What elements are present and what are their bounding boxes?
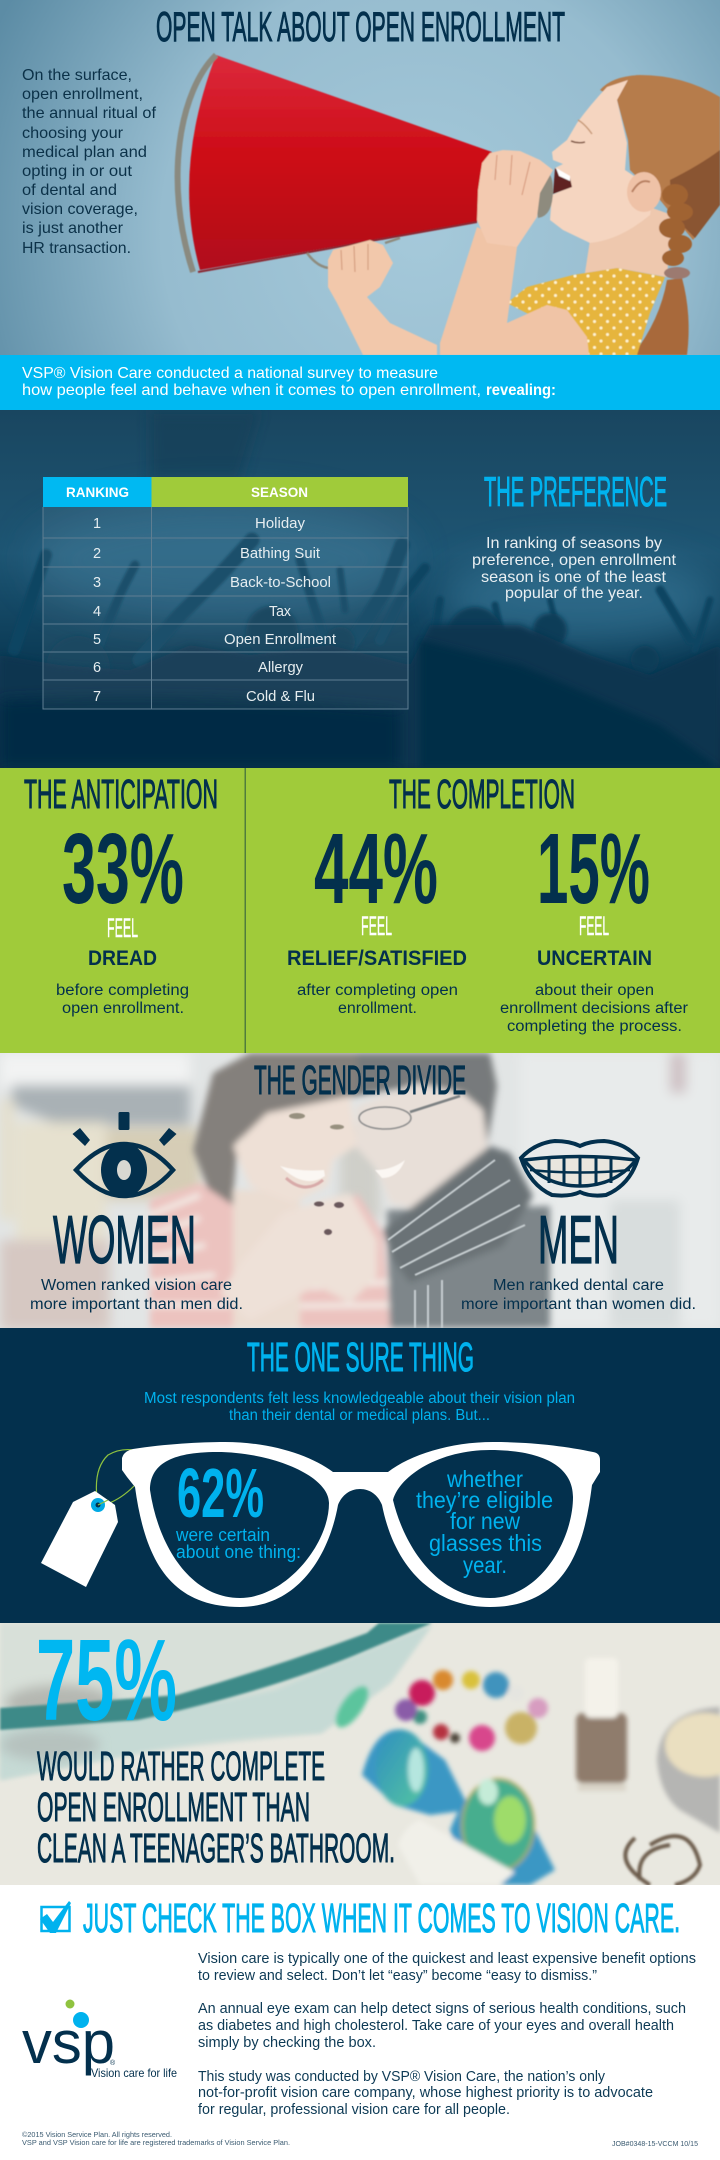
panel: check the box	[0, 1885, 720, 2160]
text block: preference description: preference, open enrollment	[472, 552, 677, 569]
table: season rankings: SEASON	[251, 484, 308, 500]
right lens text: they’re eligible	[416, 1487, 553, 1513]
stat: 44% relief: FEEL	[361, 911, 392, 941]
panel: hero	[0, 0, 720, 355]
text block: preference description	[472, 535, 677, 602]
text block: intro: vision coverage,	[22, 201, 138, 218]
icon: white glasses	[122, 1442, 600, 1607]
table: season rankings	[43, 477, 408, 709]
stat: 44% relief: RELIEF/SATISFIED	[287, 947, 467, 970]
stat: 44% relief: after completing open	[297, 982, 458, 999]
text block: vision care: to review and select. Don’t let “easy” become “easy to dismiss.”	[198, 1967, 597, 1984]
stat: 33% dread: 33%	[62, 813, 184, 925]
heading: the gender divide: THE GENDER DIVIDE	[254, 1057, 466, 1103]
table: season rankings: Back-to-School	[230, 575, 331, 591]
stat: 33% dread: before completing	[56, 982, 189, 999]
left lens text: were certain	[175, 1525, 270, 1545]
panel: the one sure thing	[0, 1328, 720, 1623]
text block: vision care	[198, 1950, 696, 2118]
panel: survey banner: revealing:	[486, 382, 556, 399]
panel: survey banner: VSP® Vision Care conducted a national survey to measure	[22, 365, 438, 382]
stat: 33% dread: FEEL	[107, 913, 138, 943]
panel: survey banner	[0, 355, 720, 410]
table: season rankings: 7	[93, 689, 101, 705]
text block: vision care: simply by checking the box.	[198, 2034, 376, 2051]
stat: 33% dread	[56, 813, 189, 1017]
text block: respondents	[144, 1390, 575, 1424]
text block: preference description: popular of the year.	[505, 585, 643, 602]
label: men: more important than women did.	[461, 1296, 696, 1313]
logo: VSP: ®	[110, 2059, 116, 2067]
text block: vision care: not-for-profit vision care company, whose highest priority is to advocate	[198, 2084, 653, 2101]
left lens text	[175, 1454, 301, 1562]
text block: vision care: Vision care is typically one of the quickest and least expensive benefit options	[198, 1950, 696, 1967]
text block: intro: opting in or out	[22, 163, 133, 180]
text block: vision care: as diabetes and high cholesterol. Take care of your eyes and overall health	[198, 2017, 674, 2034]
stat: 15% uncertain: enrollment decisions after	[500, 1000, 688, 1017]
right lens text	[416, 1466, 553, 1578]
table: season rankings: Cold & Flu	[246, 689, 315, 705]
stat: 44% relief: enrollment.	[338, 1000, 417, 1017]
text block: intro: is just another	[22, 220, 124, 237]
right lens text: glasses this	[429, 1530, 542, 1556]
left lens text: 62%	[177, 1454, 264, 1532]
left lens text: about one thing:	[176, 1542, 301, 1562]
logo: VSP: Vision care for life	[91, 2066, 177, 2080]
text block: intro: HR transaction.	[22, 240, 131, 257]
text block: respondents: Most respondents felt less knowledgeable about their vision plan	[144, 1390, 575, 1407]
stat: 33% dread: DREAD	[88, 947, 157, 970]
icon: checkbox	[40, 1901, 71, 1933]
photo: girl with red megaphone	[178, 55, 720, 355]
panel: the gender divide	[0, 1053, 720, 1330]
table: season rankings: 5	[93, 632, 101, 648]
table: season rankings: 6	[93, 660, 101, 676]
text block: intro: On the surface,	[22, 67, 132, 84]
table: season rankings: Tax	[269, 604, 292, 620]
panel: anticipation and completion	[0, 768, 720, 1053]
label: men	[461, 1202, 696, 1313]
panel: 75 percent bathroom	[0, 1615, 720, 1885]
text block: rather complete	[37, 1743, 395, 1871]
icon: smiling mouth	[521, 1141, 638, 1196]
stat: 15% uncertain: completing the process.	[507, 1018, 682, 1035]
table: season rankings: Bathing Suit	[240, 546, 320, 562]
text block: intro: of dental and	[22, 182, 117, 199]
text block: preference description: season is one of the least	[481, 569, 667, 586]
text block: vision care: for regular, professional vision care for all people.	[198, 2101, 510, 2118]
stat: 15% uncertain: UNCERTAIN	[537, 947, 652, 970]
footer: legal: JOB#0348-15-VCCM 10/15	[612, 2139, 698, 2148]
table: season rankings: Holiday	[255, 516, 306, 532]
table: season rankings: 4	[93, 604, 101, 620]
stat: 33% dread: open enrollment.	[62, 1000, 184, 1017]
logo: VSP: vsp	[22, 2009, 115, 2076]
icon: eye	[72, 1112, 176, 1197]
stat: 15% uncertain	[500, 813, 688, 1035]
label: men: Men ranked dental care	[493, 1277, 664, 1294]
text block: rather complete: OPEN ENROLLMENT THAN	[37, 1784, 310, 1830]
stat: 44% relief: 44%	[314, 813, 438, 925]
table: season rankings: 1	[93, 516, 101, 532]
footer: legal: ©2015 Vision Service Plan. All rights reserved.	[22, 2130, 172, 2139]
table: season rankings: RANKING	[66, 484, 129, 500]
text block: respondents: than their dental or medical plans. But...	[229, 1407, 490, 1424]
stat: 44% relief	[287, 813, 467, 1017]
label: men: MEN	[538, 1202, 619, 1278]
text block: intro	[22, 67, 157, 257]
text block: rather complete: WOULD RATHER COMPLETE	[37, 1743, 325, 1789]
heading: the anticipation: THE ANTICIPATION	[24, 771, 218, 817]
right lens text: year.	[463, 1552, 507, 1578]
table: season rankings: Open Enrollment	[224, 632, 336, 648]
photo: couple	[0, 1053, 720, 1330]
heading: the one sure thing: THE ONE SURE THING	[247, 1334, 474, 1380]
text block: intro: medical plan and	[22, 144, 147, 161]
text block: preference description: In ranking of seasons by	[486, 535, 662, 552]
text block: vision care: This study was conducted by VSP® Vision Care, the nation’s only	[198, 2068, 605, 2085]
stat: 75%: 75%	[36, 1615, 177, 1745]
footer: legal: VSP and VSP Vision care for life are registered trademarks of Vision Service Plan.	[22, 2138, 290, 2147]
label: women: more important than men did.	[30, 1296, 243, 1313]
text block: vision care: An annual eye exam can help detect signs of serious health conditions, such	[198, 2000, 686, 2017]
table: season rankings: 2	[93, 546, 101, 562]
stat: 15% uncertain: FEEL	[579, 911, 609, 941]
table: season rankings: Allergy	[258, 660, 304, 676]
text block: rather complete: CLEAN A TEENAGER’S BATHROOM.	[37, 1825, 395, 1871]
stat: 15% uncertain: about their open	[535, 982, 654, 999]
right lens text: whether	[446, 1466, 523, 1492]
right lens text: for new	[450, 1508, 520, 1534]
label: women	[30, 1202, 243, 1313]
label: women: WOMEN	[53, 1202, 196, 1278]
panel: the preference	[0, 410, 720, 768]
label: women: Women ranked vision care	[41, 1277, 232, 1294]
panel: survey banner: how people feel and behave when it comes to open enrollment,	[22, 382, 481, 399]
logo: VSP	[22, 2000, 177, 2080]
icon: price tag	[41, 1450, 134, 1587]
footer: legal	[22, 2130, 698, 2148]
text block: intro: the annual ritual of	[22, 105, 157, 122]
photo: bathroom counter	[0, 1623, 720, 1885]
table: season rankings: 3	[93, 575, 101, 591]
photo: concert crowd	[0, 410, 720, 768]
text block: intro: choosing your	[22, 125, 124, 142]
text block: intro: open enrollment,	[22, 86, 143, 103]
